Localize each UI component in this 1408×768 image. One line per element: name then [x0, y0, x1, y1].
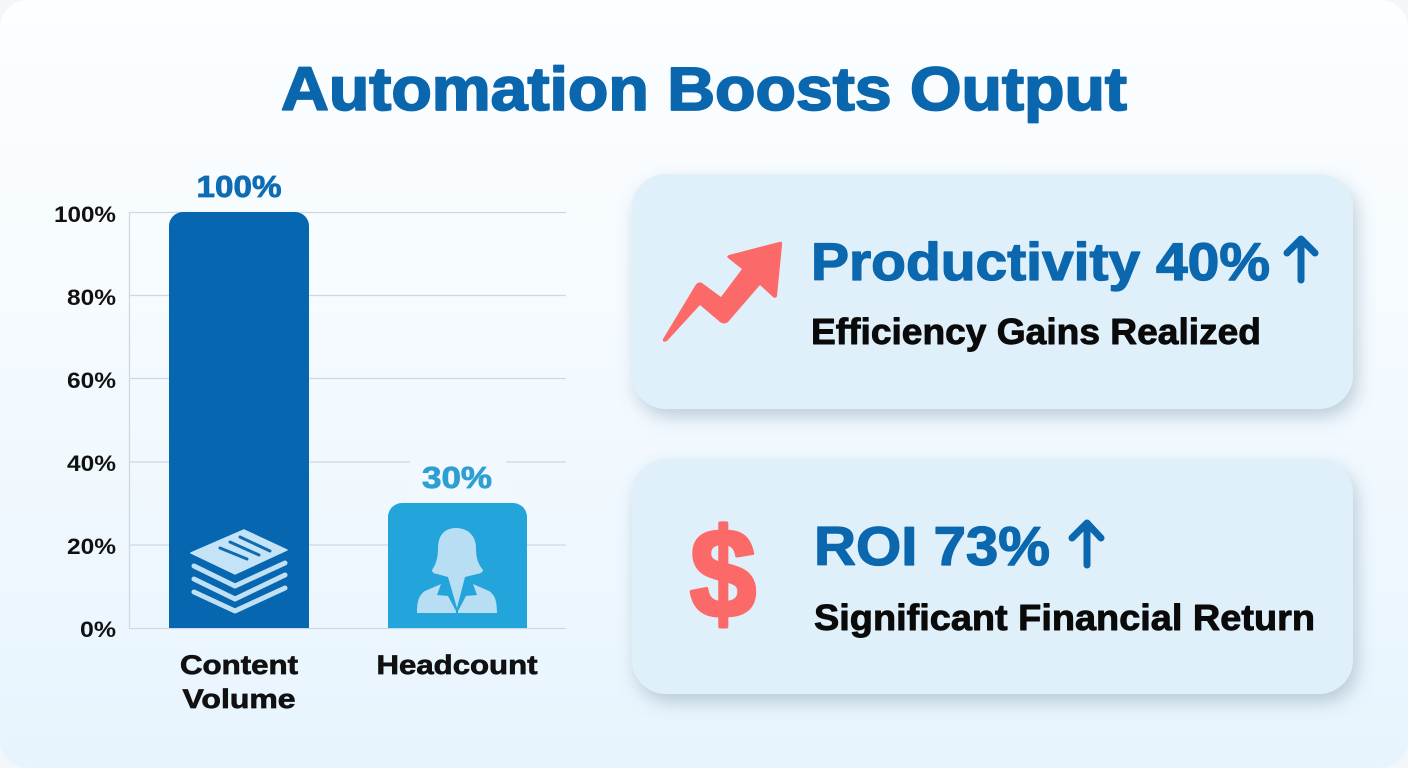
heading: roi: ROI 73% — [814, 515, 1050, 577]
y axis labels: 0% — [80, 617, 116, 642]
icon: document stack — [191, 530, 287, 611]
value label: 100%: 100% — [196, 169, 282, 204]
y axis labels: 20% — [67, 534, 116, 559]
value label: 30%: 30% — [422, 460, 492, 495]
arrow: up — [1072, 523, 1101, 565]
subheading: financial return: Significant Financial Return — [814, 597, 1315, 638]
y axis labels: 40% — [67, 451, 116, 476]
bar: headcount — [388, 503, 527, 628]
category label: content volume — [180, 650, 298, 714]
y axis labels: 80% — [67, 285, 116, 310]
y axis labels: 100% — [54, 202, 116, 227]
title: Automation Boosts Output — [281, 55, 1127, 123]
y axis labels: 60% — [67, 368, 116, 393]
panel: roi — [632, 459, 1353, 694]
category label: content volume: Content — [180, 650, 298, 680]
bar chart — [54, 169, 566, 714]
y axis labels — [54, 202, 116, 642]
value label: 30% — [410, 455, 506, 495]
arrow: up — [1287, 239, 1315, 280]
icon: person — [417, 528, 497, 613]
icon: rising arrow — [663, 242, 782, 342]
subheading: efficiency: Efficiency Gains Realized — [811, 311, 1261, 352]
icon: dollar sign: $ — [690, 503, 756, 644]
heading: productivity: Productivity 40% — [811, 233, 1270, 292]
panel: productivity — [632, 174, 1353, 409]
category label: headcount: Headcount — [376, 650, 538, 680]
category label: content volume: Volume — [182, 684, 296, 714]
bar: content volume — [169, 212, 309, 628]
